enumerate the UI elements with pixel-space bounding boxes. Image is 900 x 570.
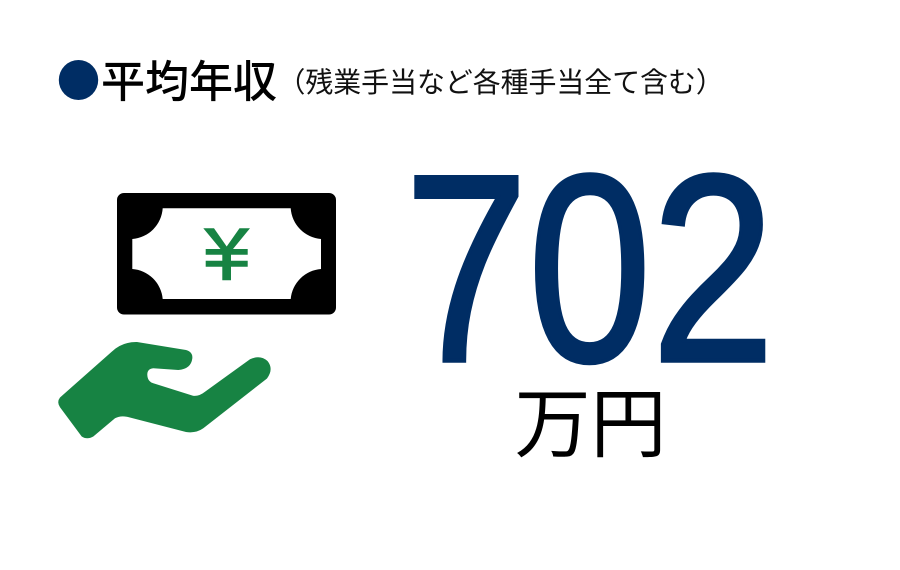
heading bullet xyxy=(59,60,98,100)
icon: banknote xyxy=(117,193,336,314)
icon: open hand xyxy=(58,342,271,438)
heading note: （残業手当など各種手当全て含む） xyxy=(278,67,724,98)
big value: 702 xyxy=(405,120,775,418)
heading xyxy=(59,58,724,107)
unit: 万円 xyxy=(514,383,666,468)
icon: yen sign xyxy=(203,228,250,280)
heading title: 平均年収 xyxy=(101,58,277,107)
